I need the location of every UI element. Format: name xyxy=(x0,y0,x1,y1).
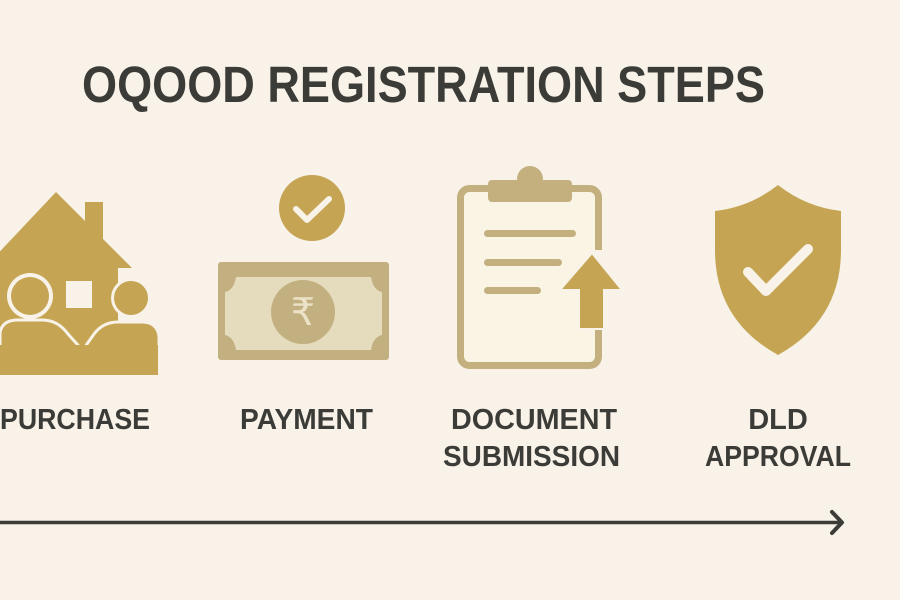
label: dld approval xyxy=(705,404,851,473)
label: dld approval: APPROVAL xyxy=(705,441,851,473)
icon: clipboard with upload arrow xyxy=(460,166,622,366)
arrow: timeline xyxy=(0,512,842,533)
label: dld approval: DLD xyxy=(748,404,808,436)
label: document submission xyxy=(443,404,620,473)
icon: payment banknote with check xyxy=(218,175,389,360)
label: purchase: PURCHASE xyxy=(0,404,150,436)
label: document submission: DOCUMENT xyxy=(451,404,617,436)
icon: house with people xyxy=(0,192,159,375)
icon: payment banknote with check: ₹ xyxy=(291,290,315,334)
label: document submission: SUBMISSION xyxy=(443,441,620,473)
title: OQOOD REGISTRATION STEPS xyxy=(82,56,765,113)
label: payment: PAYMENT xyxy=(240,404,373,436)
icon: shield with check xyxy=(715,185,841,355)
